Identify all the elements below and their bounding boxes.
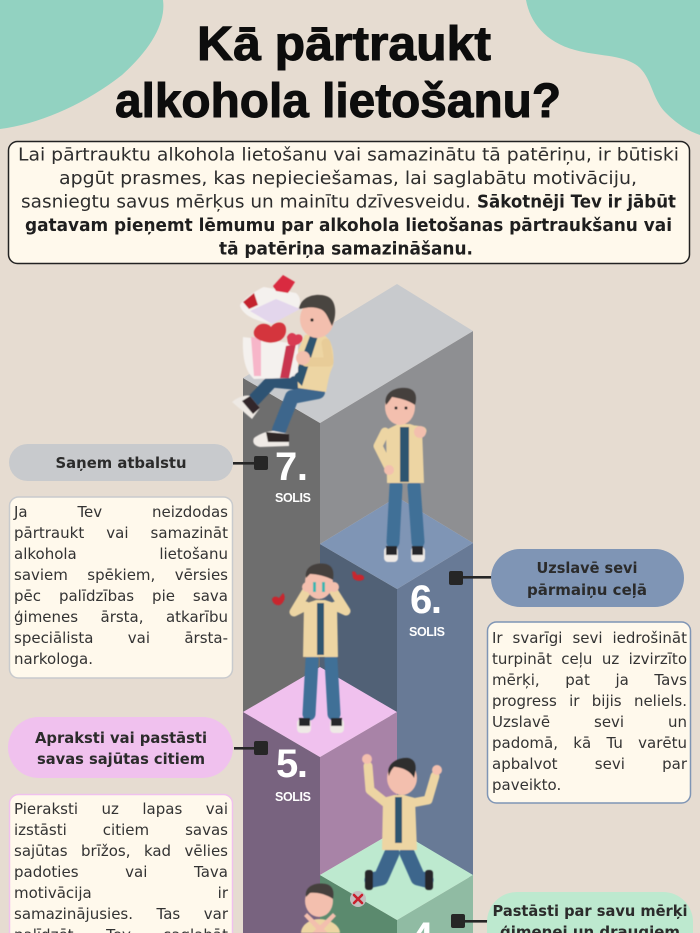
staircase: step 7 block xyxy=(243,284,473,720)
heading pill: step 6: pārmaiņu ceļā xyxy=(527,581,647,599)
staircase: step 4 block xyxy=(320,830,473,933)
text block: step 6 xyxy=(492,629,688,794)
step number 7 xyxy=(275,445,311,505)
decorative blob: top right xyxy=(526,0,700,135)
decorative blob: top left xyxy=(0,0,163,129)
title: Kā pārtraukt xyxy=(197,18,491,71)
text panel background: step 7 xyxy=(10,497,232,678)
step number 6: 6. xyxy=(410,578,442,622)
staircase: step 5 block xyxy=(243,667,397,933)
text block: step 7: ģimenes ārsta, atkarību xyxy=(14,608,228,626)
intro panel: apgūt prasmes, kas nepieciešamas, lai saglabātu motivāciju, xyxy=(59,168,637,189)
step number 5: 5. xyxy=(276,742,308,786)
text block: step 5: Pieraksti uz lapas vai xyxy=(14,800,228,818)
figure: person kneeling with raised arms (step 4) xyxy=(362,754,442,890)
connector: step 6 xyxy=(449,571,492,585)
text panel background: step 5 xyxy=(10,794,232,933)
intro panel xyxy=(8,142,690,264)
connector: step 4 xyxy=(451,914,488,928)
heading pill: step 5 xyxy=(8,717,233,778)
text block: step 7: narkologa. xyxy=(14,650,93,668)
step number 6: SOLIS xyxy=(409,625,445,639)
text block: step 7: alkohola lietošanu xyxy=(14,545,228,563)
title: alkohola lietošanu? xyxy=(115,75,561,128)
intro panel: sasniegtu savus mērķus un mainītu dzīvesveidu. xyxy=(21,192,471,212)
step number 5 xyxy=(275,742,311,804)
text block: step 6: progress ir bijis neliels. xyxy=(492,692,687,710)
step number 7: SOLIS xyxy=(275,491,311,505)
step number 7: 7. xyxy=(275,445,308,489)
heading pill: step 4: Pastāsti par savu mērķi xyxy=(492,902,688,920)
text block: step 6: Uzslavē sevi un xyxy=(492,713,687,731)
text block: step 7 xyxy=(13,503,228,668)
intro panel: Lai pārtrauktu alkohola lietošanu vai samazinātu tā patēriņu, ir būtiski xyxy=(18,144,679,166)
heading pill: step 7 xyxy=(9,444,233,481)
text block: step 5: motivācija ir xyxy=(14,884,228,902)
intro panel: gatavam pieņemt lēmumu par alkohola lietošanas pārtraukšanu vai xyxy=(25,216,672,236)
text block: step 6: paveikto. xyxy=(492,776,561,794)
figure: person sitting with gift box (step 7) xyxy=(232,275,335,447)
text block: step 7: pēc palīdzības pie sava xyxy=(14,587,228,605)
heading pill: step 4 xyxy=(487,892,693,933)
heading pill: step 6 xyxy=(491,549,684,607)
text block: step 6: apbalvot sevi par xyxy=(492,755,687,773)
staircase: step 6 block xyxy=(320,497,473,880)
text block: step 6: turpināt ceļu uz izvirzīto xyxy=(492,650,687,668)
heading pill: step 6: Uzslavē sevi xyxy=(536,559,638,577)
text block: step 7: speciālista vai ārsta- xyxy=(14,629,228,647)
text panel background: step 6 xyxy=(488,622,690,803)
step number 6 xyxy=(409,578,445,639)
text block: step 6: Ir svarīgi sevi iedrošināt xyxy=(492,629,687,647)
connector: step 5 xyxy=(234,741,268,755)
text block: step 7: saviem spēkiem, vērsies xyxy=(14,566,228,584)
connector: step 7 xyxy=(233,456,268,470)
title xyxy=(115,18,561,128)
figure: person with crossed arms (step 3) xyxy=(301,884,340,933)
intro panel: tā patēriņa samazināšanu. xyxy=(219,240,473,260)
text block: step 5: izstāsti citiem savas xyxy=(14,821,228,839)
heading pill: step 5: Apraksti vai pastāsti xyxy=(35,729,207,747)
heading pill: step 7: Saņem atbalstu xyxy=(56,454,186,472)
figure: person crying (step 5) xyxy=(272,564,364,733)
step number 5: SOLIS xyxy=(275,790,311,804)
text block: step 7: pārtraukt vai samazināt xyxy=(14,524,228,542)
icon: red cross badge xyxy=(350,891,366,907)
text block: step 5: samazinājusies. Tas var xyxy=(14,905,228,923)
heading pill: step 5: savas sajūtas citiem xyxy=(37,750,205,768)
figure: person standing, hand on hip (step 6) xyxy=(378,388,426,562)
text block: step 6: padomā, kā Tu varētu xyxy=(492,734,687,752)
text block: step 7: Ja Tev neizdodas xyxy=(14,503,228,521)
text block: step 6: mērķi, pat ja Tavs xyxy=(492,671,687,689)
intro panel: Sākotnēji Tev ir jābūt xyxy=(477,192,676,212)
text block: step 5 xyxy=(14,800,228,933)
text block: step 5: padoties vai Tava xyxy=(14,863,228,881)
text block: step 5: sajūtas brīžos, kad vēlies xyxy=(14,842,228,860)
